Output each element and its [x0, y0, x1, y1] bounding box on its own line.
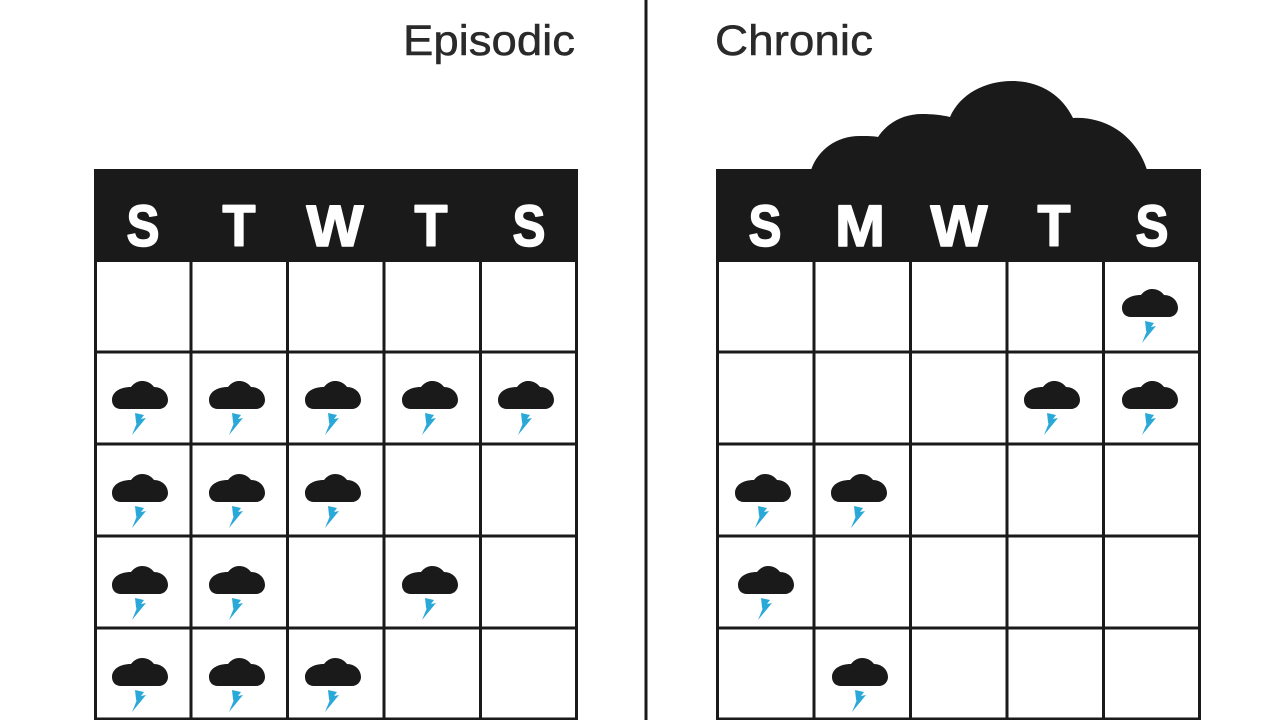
weekday labels: chronic: S — [748, 194, 782, 259]
weekday labels: episodic: S — [512, 194, 546, 259]
weekday labels: chronic: W — [930, 194, 988, 259]
storm icons: episodic — [112, 381, 554, 712]
panel: chronic calendar — [716, 81, 1201, 720]
calendar grid: chronic — [716, 262, 1201, 720]
weekday labels: chronic: M — [835, 194, 885, 259]
center divider — [644, 0, 648, 720]
panel: episodic calendar — [94, 169, 578, 720]
calendar grid: episodic — [94, 262, 578, 720]
weekday labels: episodic: T — [414, 194, 448, 259]
header bar: episodic — [94, 169, 578, 262]
weekday labels: episodic: T — [222, 194, 256, 259]
title: Episodic: Episodic — [403, 17, 575, 65]
weekday labels: chronic: T — [1038, 194, 1070, 259]
weekday labels: chronic — [748, 194, 1168, 259]
big cloud over header — [811, 81, 1147, 170]
title: Chronic: Chronic — [715, 17, 873, 65]
storm icons: chronic — [735, 289, 1178, 712]
weekday labels: episodic: W — [306, 194, 364, 259]
weekday labels: episodic — [126, 194, 546, 259]
weekday labels: episodic: S — [126, 194, 160, 259]
header bar: chronic — [716, 169, 1201, 262]
weekday labels: chronic: S — [1136, 194, 1168, 259]
